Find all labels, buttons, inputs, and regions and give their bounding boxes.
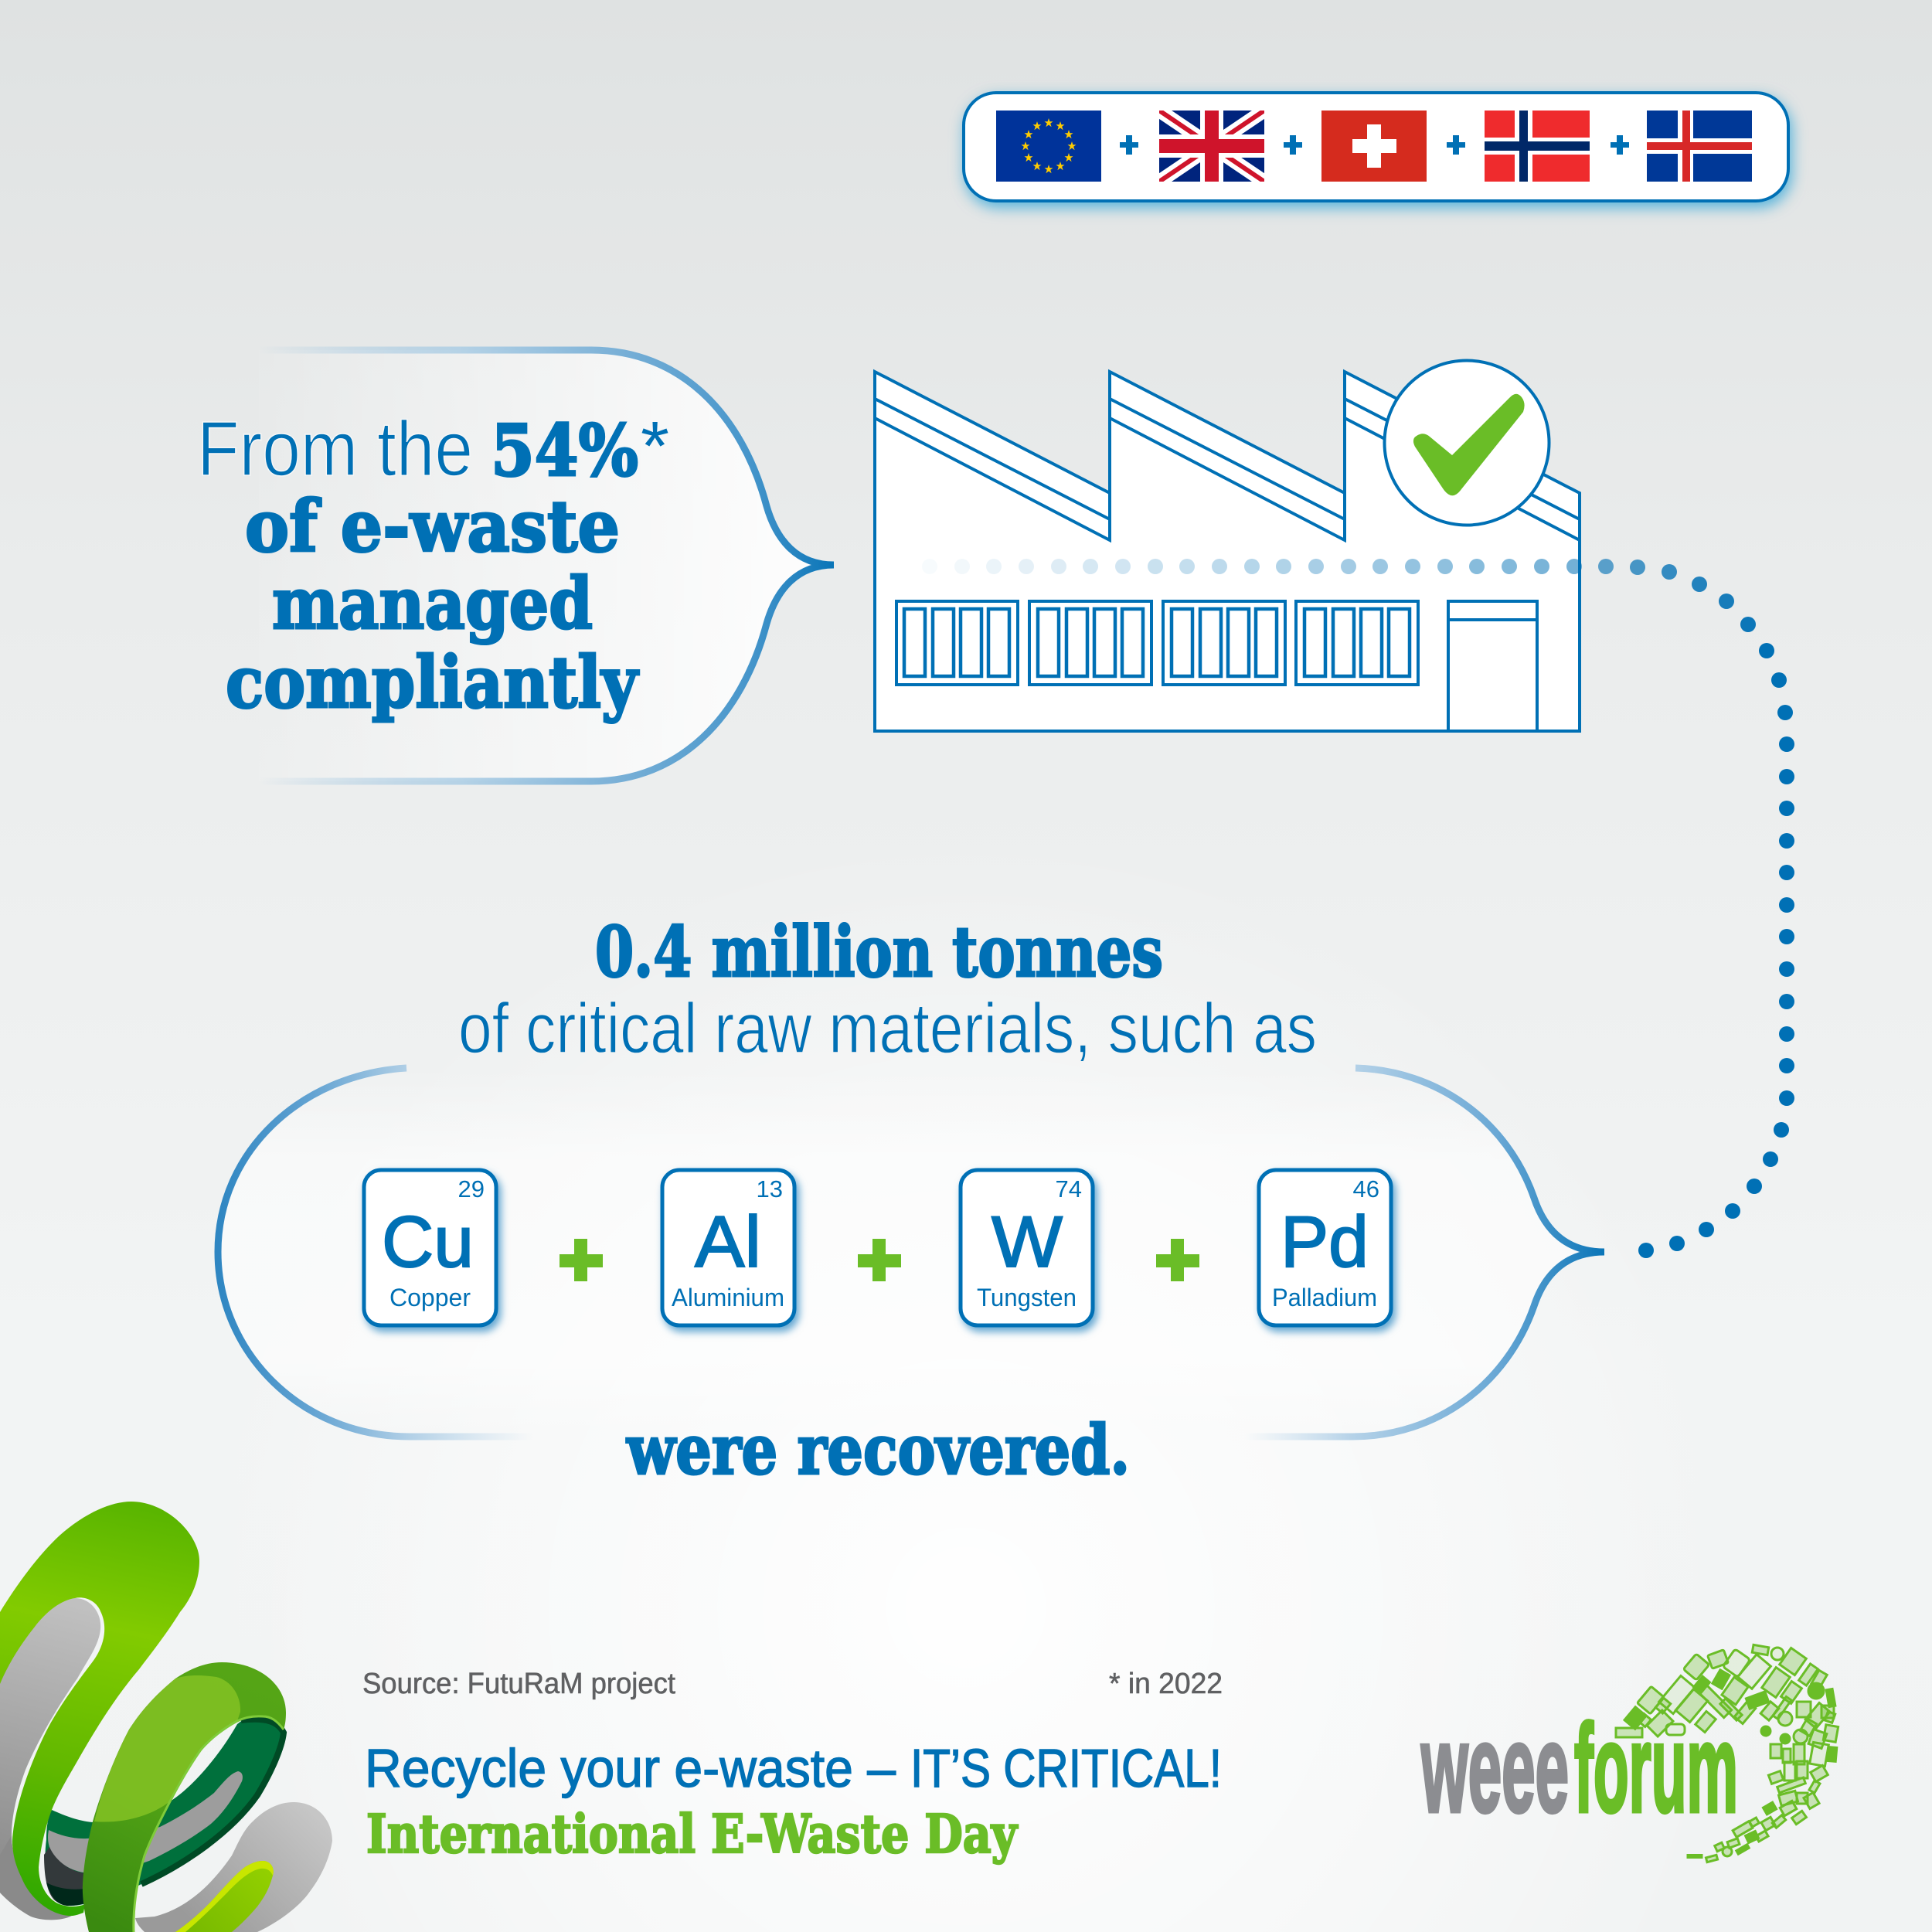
back ring dark rim bbox=[141, 1719, 284, 1884]
element card: copper bbox=[364, 1170, 496, 1325]
element card: copper: Cu bbox=[382, 1201, 474, 1282]
lime accent bbox=[175, 1861, 274, 1932]
text: from the 54% of e-waste managed compliantly: of e-waste bbox=[245, 485, 620, 568]
main green blade bbox=[0, 1502, 199, 1916]
back ring interior gray bbox=[48, 1771, 243, 1872]
speech bubble: materials bbox=[218, 1068, 1604, 1437]
flags panel frame bbox=[964, 93, 1788, 201]
plus sign bbox=[858, 1239, 901, 1281]
text: from the 54% of e-waste managed compliantly: compliantly bbox=[226, 641, 639, 724]
text: source: Source: FutuRaM project bbox=[362, 1668, 675, 1700]
element card: tungsten: W bbox=[992, 1201, 1063, 1282]
front ring inner rim bbox=[134, 1716, 284, 1932]
element card: tungsten bbox=[961, 1170, 1093, 1325]
text: recycle your e-waste: Recycle your e-waste – bbox=[365, 1738, 896, 1798]
plus sign bbox=[1156, 1239, 1199, 1281]
icon: factory bbox=[875, 372, 1580, 731]
element card: tungsten: Tungsten bbox=[977, 1284, 1077, 1311]
flag: European Union bbox=[996, 111, 1101, 182]
text: recycle your e-waste: IT’S CRITICAL! bbox=[910, 1738, 1222, 1798]
text: from the 54% of e-waste managed compliantly: managed bbox=[272, 562, 593, 645]
element card: aluminium bbox=[662, 1170, 794, 1325]
decorative e-waste day swoosh logo bbox=[0, 1502, 332, 1932]
element card: palladium: 46 bbox=[1353, 1175, 1379, 1202]
panel: country flags bbox=[964, 93, 1788, 201]
speech bubble: 54% bbox=[259, 350, 834, 781]
lower gray blade bbox=[135, 1802, 332, 1932]
factory windows bbox=[896, 601, 1418, 685]
logo wordmark: weee bbox=[1421, 1699, 1569, 1838]
flag: Iceland bbox=[1647, 111, 1752, 182]
back ring bottom bbox=[46, 1883, 89, 1906]
element card: copper: Copper bbox=[389, 1284, 471, 1311]
flag: United Kingdom bbox=[1159, 111, 1264, 182]
element card: palladium bbox=[1259, 1170, 1391, 1325]
text: footnote in 2022: * in 2022 bbox=[1109, 1668, 1223, 1700]
element card: aluminium: 13 bbox=[757, 1175, 783, 1202]
element card: aluminium: Aluminium bbox=[672, 1284, 784, 1311]
front green ring bbox=[83, 1662, 286, 1932]
element card: tungsten: 74 bbox=[1056, 1175, 1082, 1202]
gray blade lower body bbox=[0, 1835, 72, 1920]
flag: Norway bbox=[1485, 111, 1590, 182]
element card: copper: 29 bbox=[458, 1175, 485, 1202]
text: were recovered: were recovered. bbox=[626, 1410, 1130, 1490]
element card: palladium: Pd bbox=[1281, 1201, 1369, 1282]
text: from the 54% of e-waste managed compliantly: 54% bbox=[491, 409, 638, 492]
text: from the 54% of e-waste managed compliantly: * bbox=[641, 408, 669, 485]
flag: Switzerland bbox=[1321, 111, 1427, 182]
factory door bbox=[1448, 601, 1537, 731]
text: from the 54% of e-waste managed compliantly bbox=[197, 406, 669, 724]
dotted connector arrow bbox=[922, 559, 1794, 1258]
text: of critical raw materials: of critical raw materials, such as bbox=[458, 989, 1317, 1068]
logo: weeeforum: forum bbox=[1574, 1699, 1738, 1838]
text: international e-waste day: International E-Waste Day bbox=[366, 1804, 1019, 1866]
plus signs between flags bbox=[1120, 135, 1629, 155]
text: from the 54% of e-waste managed compliantly: From the bbox=[197, 406, 473, 492]
front ring highlight overlay bbox=[94, 1675, 240, 1822]
logo swirl of electronic devices bbox=[1616, 1645, 1838, 1862]
back ring bbox=[45, 1716, 284, 1906]
element card: aluminium: Al bbox=[695, 1201, 761, 1282]
logo: weeeforum bbox=[1421, 1645, 1838, 1862]
gray blade bbox=[0, 1598, 100, 1920]
element card: palladium: Palladium bbox=[1272, 1284, 1377, 1311]
text: recycle your e-waste bbox=[365, 1738, 1222, 1798]
back ring shadow bbox=[44, 1847, 89, 1903]
text: 0.4 million tonnes: 0.4 million tonnes bbox=[595, 911, 1163, 993]
icon: green check in circle bbox=[1385, 360, 1549, 526]
lime accent highlight bbox=[175, 1861, 274, 1932]
plus sign bbox=[560, 1239, 603, 1281]
